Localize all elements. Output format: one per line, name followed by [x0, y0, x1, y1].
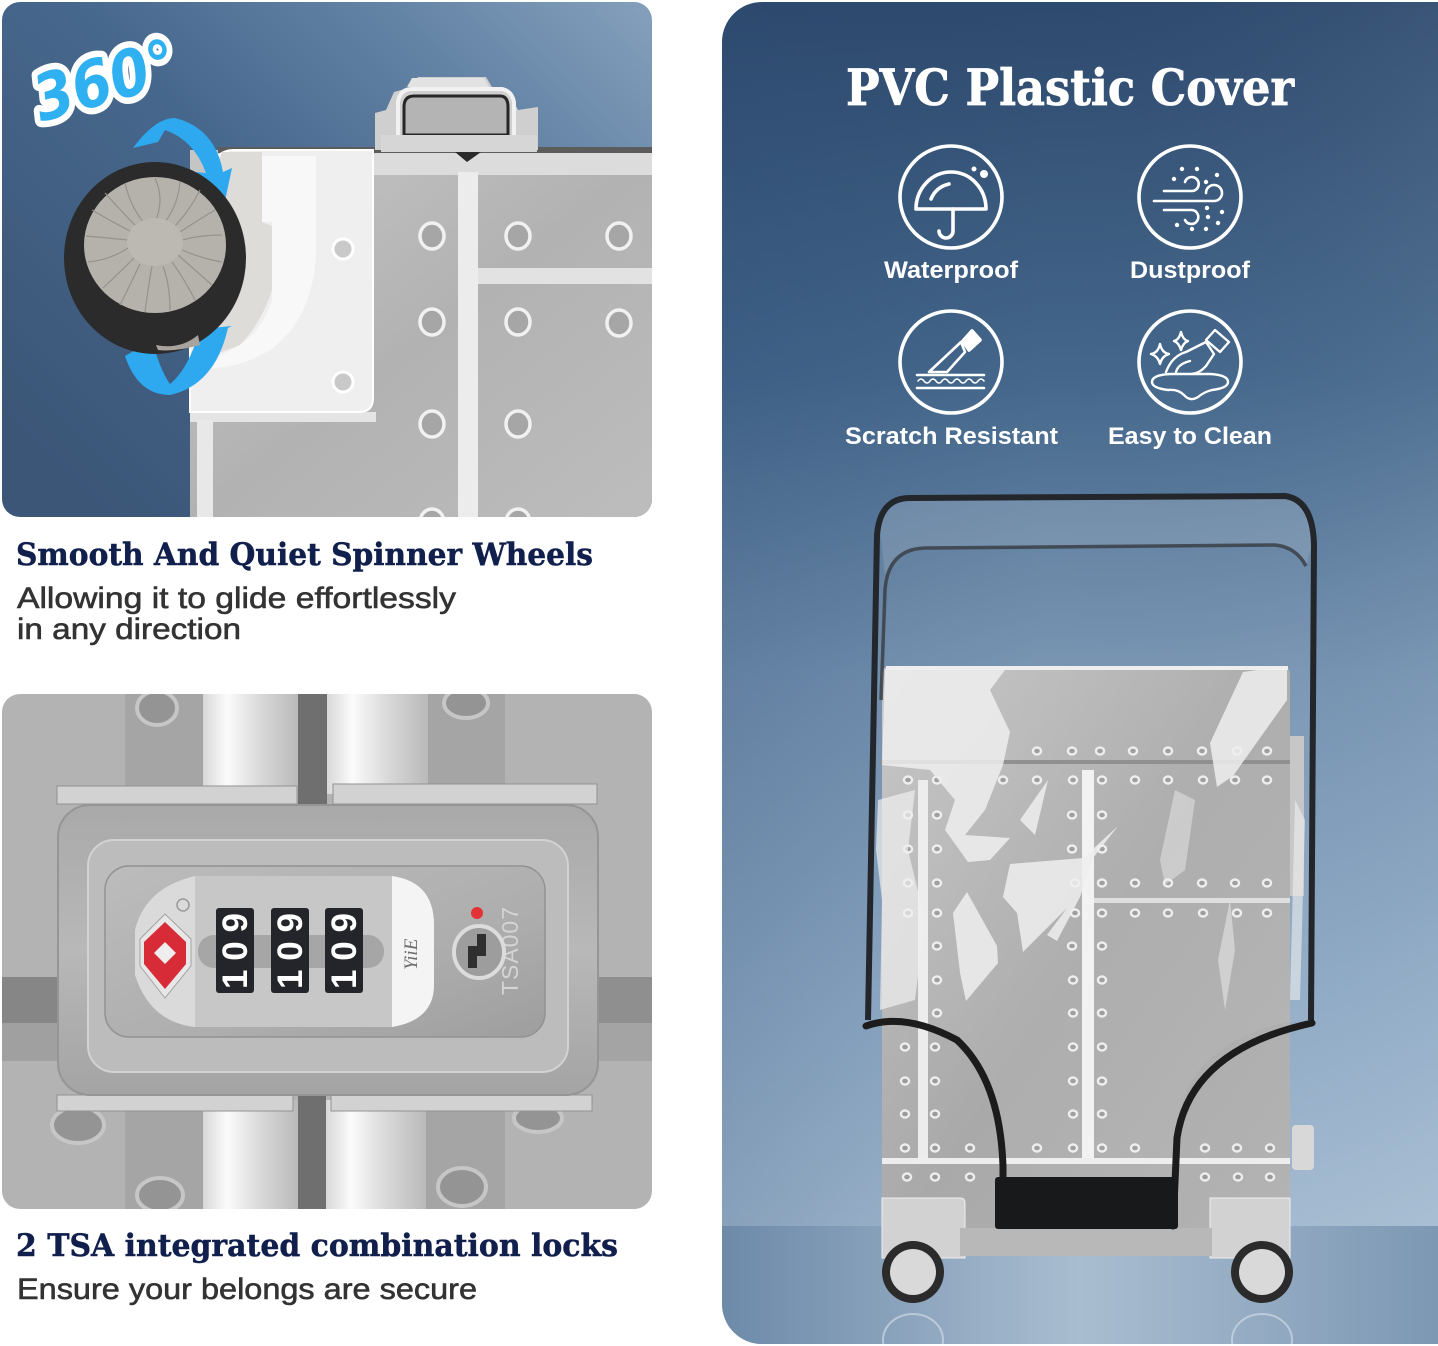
bolts	[52, 688, 562, 1212]
icon: dustproof wind	[1139, 146, 1241, 248]
icon: waterproof umbrella	[900, 146, 1002, 248]
text: wheels description: Allowing it to glide effortlessly	[17, 582, 456, 615]
black bottom strap	[995, 1177, 1178, 1229]
wheel	[64, 162, 246, 354]
transparent PVC cover	[866, 496, 1314, 1229]
label: dustproof: Dustproof	[1130, 257, 1251, 284]
TSA red diamond logo	[140, 899, 191, 998]
white wheel bracket	[190, 150, 373, 412]
suitcase side handle	[1292, 1125, 1314, 1170]
key lock and label	[454, 907, 523, 995]
corner brackets	[882, 1198, 965, 1258]
360 degree badge: 360°	[25, 26, 186, 137]
label: waterproof: Waterproof	[884, 257, 1019, 284]
suitcase rivets	[901, 748, 1274, 1180]
wheel reflections	[883, 1314, 1292, 1346]
rivets on suitcase	[420, 223, 631, 535]
text: locks description: Ensure your belongs are secure	[17, 1273, 477, 1306]
suitcase latch	[375, 77, 538, 162]
inner black trim	[881, 545, 1306, 700]
heading: TSA locks: 2 TSA integrated combination locks	[16, 1228, 618, 1264]
panel: spinner wheel photo	[2, 2, 660, 535]
suitcase wheels	[882, 1241, 1293, 1303]
icon: easy to clean	[1139, 311, 1241, 413]
combination wheels 109	[216, 908, 364, 993]
lock mounting plates	[57, 784, 597, 1111]
lock housing	[58, 805, 598, 1095]
label: easy to clean: Easy to Clean	[1108, 423, 1272, 450]
left opening trim	[862, 1018, 1006, 1177]
key lock and label: TSA007	[497, 907, 523, 995]
carry straps	[125, 694, 505, 1210]
wrinkle reflections	[876, 666, 1305, 1010]
combination wheels 109: 109	[325, 913, 364, 989]
suitcase corner body	[190, 147, 660, 520]
outer black trim	[868, 496, 1314, 1020]
rotation arrows	[125, 118, 232, 395]
right opening trim	[1173, 1023, 1312, 1226]
suitcase under cover	[880, 666, 1314, 1258]
lock faceplate	[135, 876, 434, 1027]
heading: spinner wheels: Smooth And Quiet Spinner Wheels	[16, 537, 593, 573]
text: wheels description	[17, 582, 456, 646]
icon: scratch resistant	[900, 311, 1002, 413]
combination wheels 109: 109	[271, 913, 310, 989]
text: wheels description: in any direction	[17, 613, 241, 646]
label: scratch resistant: Scratch Resistant	[845, 423, 1058, 450]
panel: combination lock photo	[2, 688, 660, 1212]
brand mark: YiiE	[401, 938, 422, 970]
panel: PVC plastic cover	[722, 2, 1438, 1346]
combination wheels 109: 109	[216, 913, 255, 989]
title: PVC Plastic Cover	[846, 58, 1295, 117]
